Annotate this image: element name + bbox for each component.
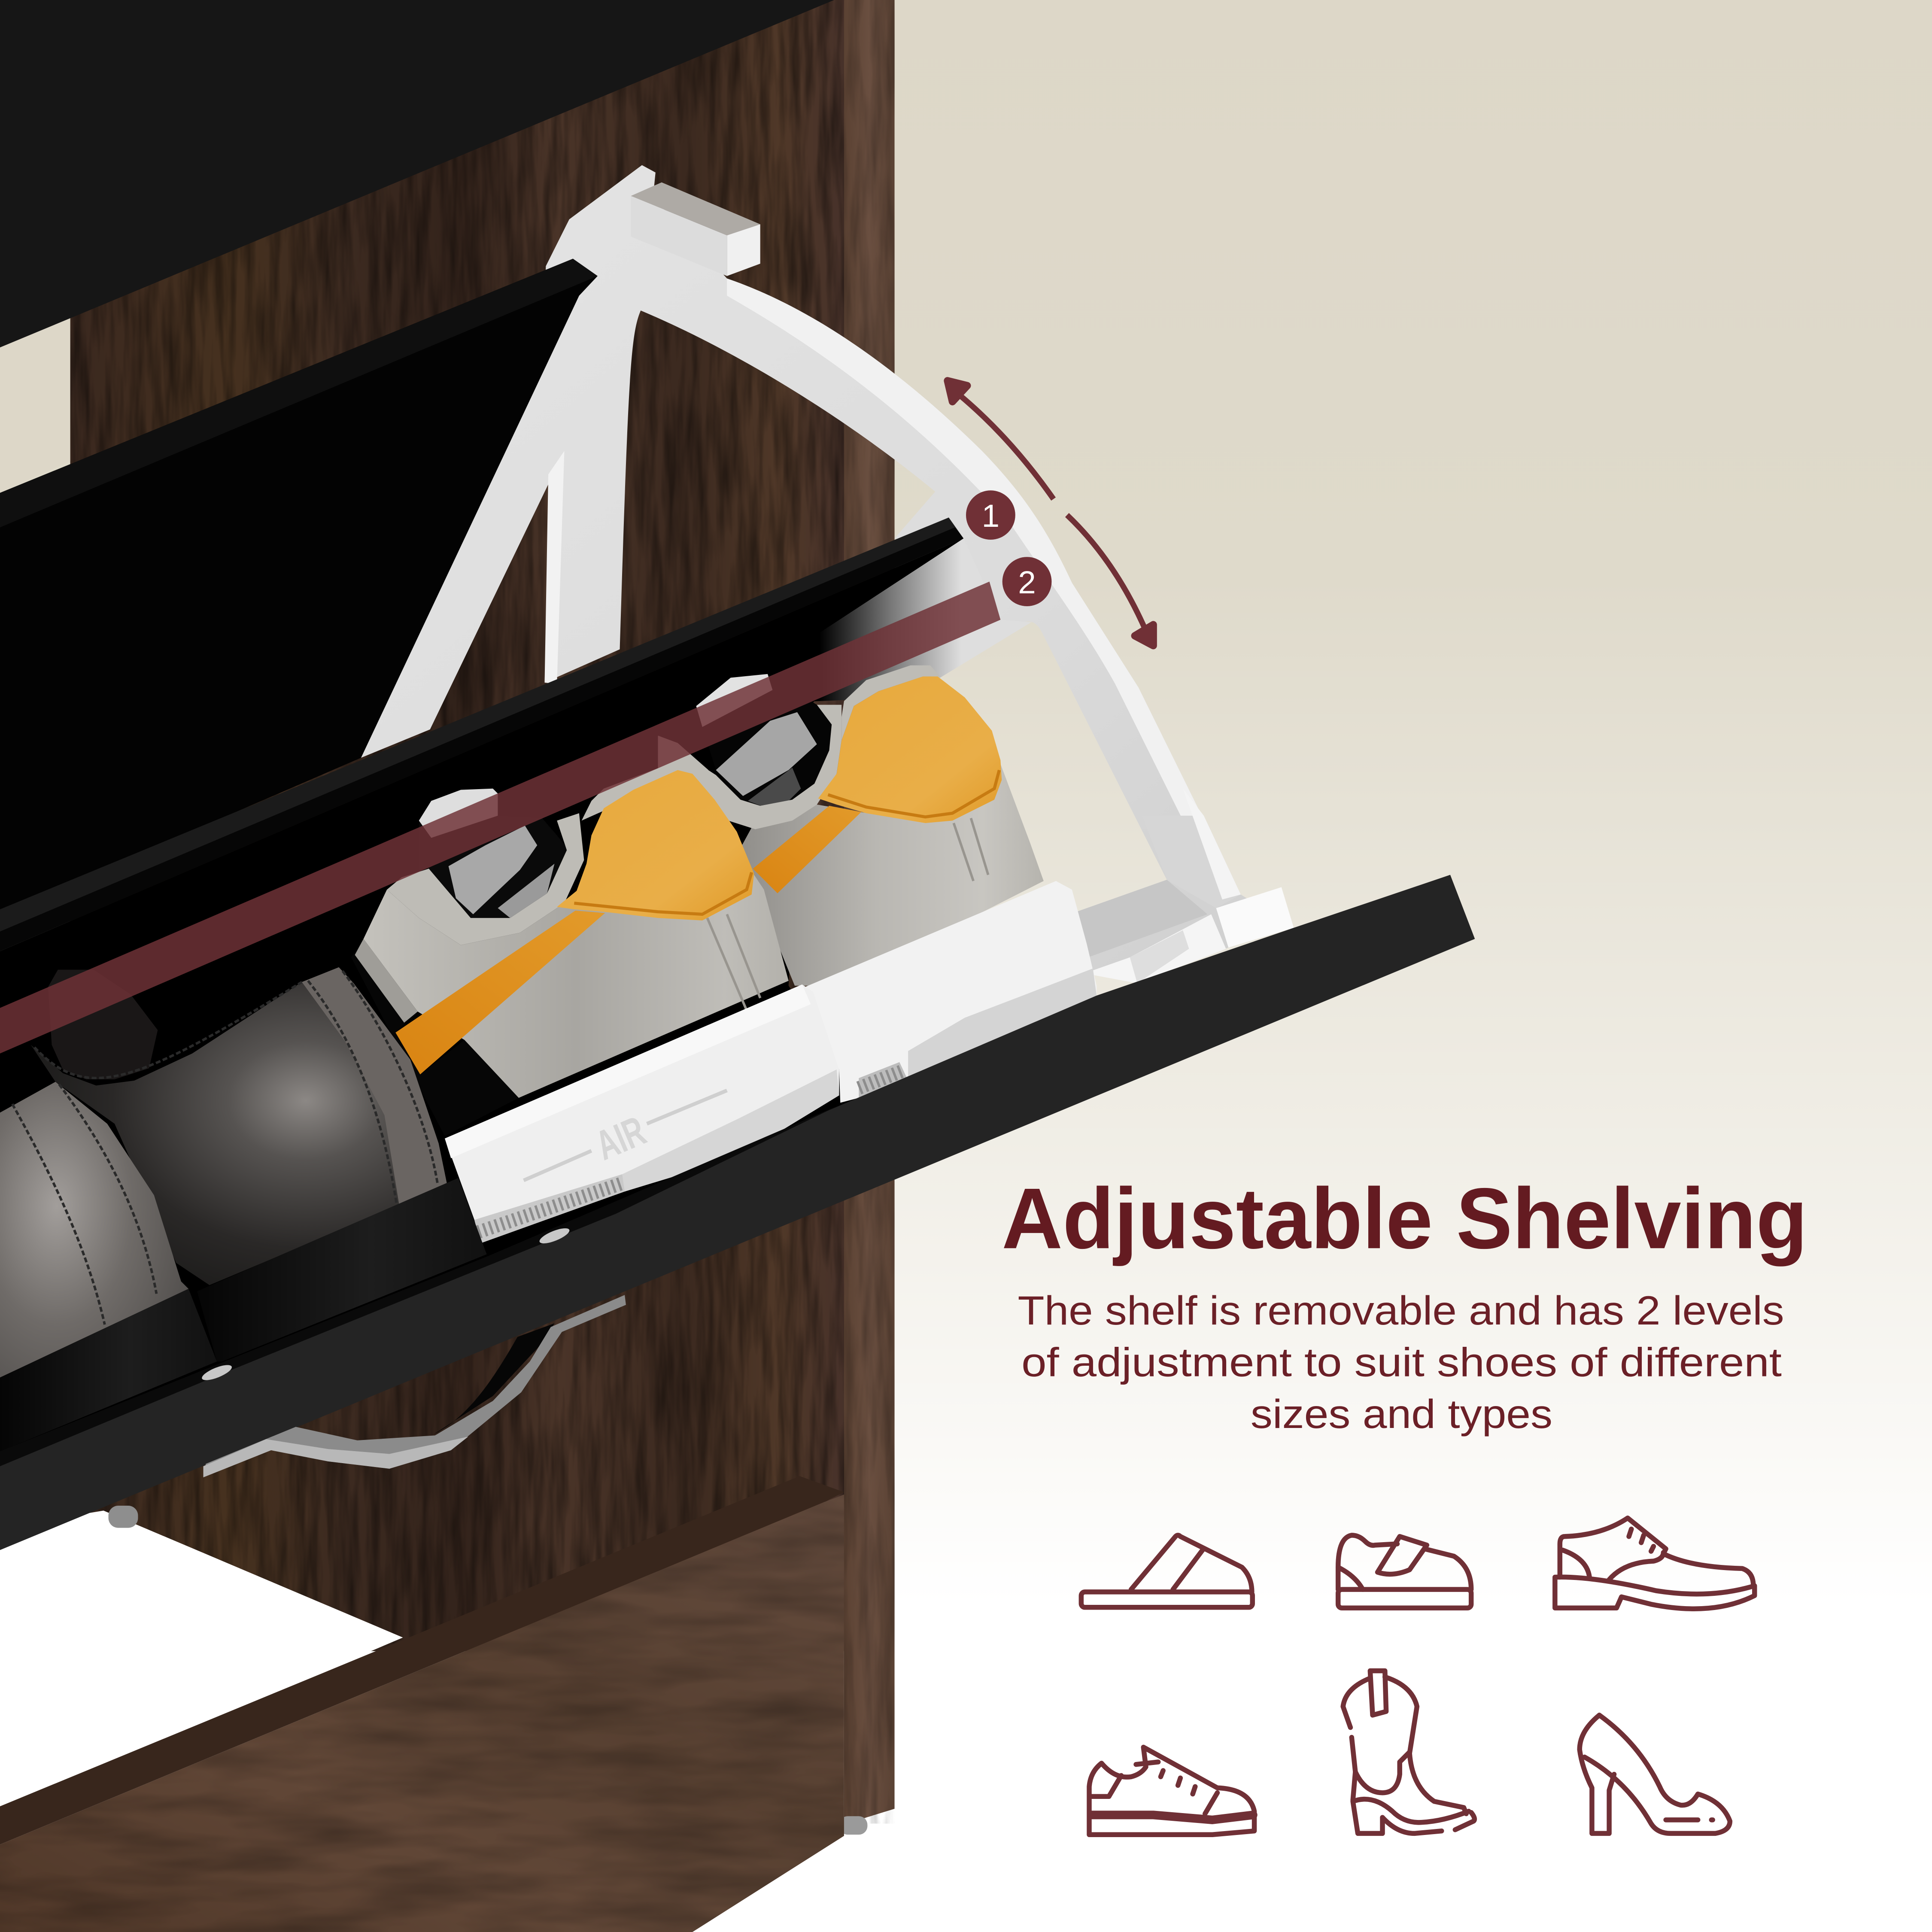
sneaker: front shoe bbox=[351, 760, 839, 1243]
AIR logo: AIR bbox=[589, 1107, 652, 1169]
AIR logo line bbox=[524, 1091, 727, 1180]
icon: sneaker bbox=[1089, 1747, 1255, 1835]
middle shelf flap edge bbox=[0, 517, 963, 951]
left dress shoe sole bbox=[0, 1289, 217, 1452]
rear shoe collar and lining bbox=[644, 665, 940, 829]
position marker 2: 2 bbox=[1018, 564, 1036, 600]
description text bbox=[1018, 1288, 1784, 1437]
top black drawer panel bbox=[0, 0, 834, 347]
left dress shoe bbox=[0, 1082, 217, 1452]
shelf screws bbox=[200, 1225, 571, 1383]
right dress shoe sole bbox=[197, 1178, 487, 1361]
icon: derby shoe bbox=[1555, 1518, 1755, 1609]
rear shoe swoosh bbox=[753, 806, 861, 893]
front shoe midsole bbox=[445, 984, 839, 1243]
position marker 1: 1 bbox=[982, 498, 999, 534]
shoe type icons bbox=[1081, 1518, 1755, 1835]
icon: slide sandal bbox=[1081, 1535, 1252, 1607]
right dress shoe seam bbox=[302, 967, 447, 1205]
lower shelf bbox=[0, 875, 1475, 1550]
bracket mounting block bbox=[631, 182, 760, 276]
icon: strap shoe bbox=[1338, 1535, 1471, 1608]
rear shoe heel patch bbox=[818, 677, 1002, 823]
front shoe black side bbox=[351, 939, 519, 1136]
right dress shoe bbox=[31, 967, 487, 1361]
description text: of adjustment to suit shoes of different bbox=[1021, 1340, 1782, 1385]
translucent shelf position band bbox=[0, 582, 1000, 1054]
rear shoe patch stitching bbox=[828, 770, 999, 817]
upper shelf flap bbox=[0, 259, 598, 914]
position marker 2 bbox=[1002, 557, 1051, 606]
rear shoe sole bbox=[802, 881, 1097, 1103]
rear shoe upper bbox=[739, 764, 1044, 986]
under-shelf metal spring arm bbox=[204, 1295, 626, 1477]
position marker 1 bbox=[966, 490, 1015, 540]
description text: The shelf is removable and has 2 levels bbox=[1018, 1288, 1784, 1334]
white hinge bracket bbox=[361, 165, 1294, 983]
front shoe patch stitching bbox=[574, 872, 752, 914]
arrow: up bbox=[948, 381, 1054, 499]
double-headed adjustment arrows bbox=[948, 381, 1153, 646]
rear shoe heel seam bbox=[954, 818, 988, 881]
white floor opening bbox=[0, 1510, 403, 1809]
front shoe heel patch bbox=[557, 770, 754, 920]
icon: high heel bbox=[1580, 1715, 1730, 1833]
front shoe heel seam bbox=[707, 914, 760, 1010]
cabinet side panel bbox=[844, 0, 895, 1823]
icon: western boot bbox=[1343, 1671, 1474, 1833]
sneaker: rear shoe bbox=[644, 665, 1097, 1103]
front shoe tread bbox=[622, 1069, 839, 1191]
rear shoe tread bbox=[908, 969, 1097, 1081]
dress shoe lining bbox=[48, 970, 158, 1079]
right dress shoe upper bbox=[31, 967, 447, 1285]
cabinet back panel bbox=[70, 0, 859, 1651]
cabinet base board bbox=[0, 1476, 863, 1932]
title: Adjustable Shelving bbox=[1002, 1170, 1807, 1267]
front shoe swoosh bbox=[395, 911, 605, 1075]
cabinet adjustable feet bbox=[109, 1506, 867, 1835]
front shoe collar and lining bbox=[387, 760, 693, 945]
cream window behind upper panel bbox=[0, 318, 70, 493]
dark shelf interior bbox=[0, 538, 1031, 1460]
front shoe upper bbox=[364, 875, 789, 1098]
bracket base foot bbox=[1069, 880, 1294, 983]
left dress shoe upper bbox=[0, 1082, 188, 1378]
description text: sizes and types bbox=[1251, 1391, 1552, 1437]
arrow: down bbox=[1067, 515, 1153, 646]
